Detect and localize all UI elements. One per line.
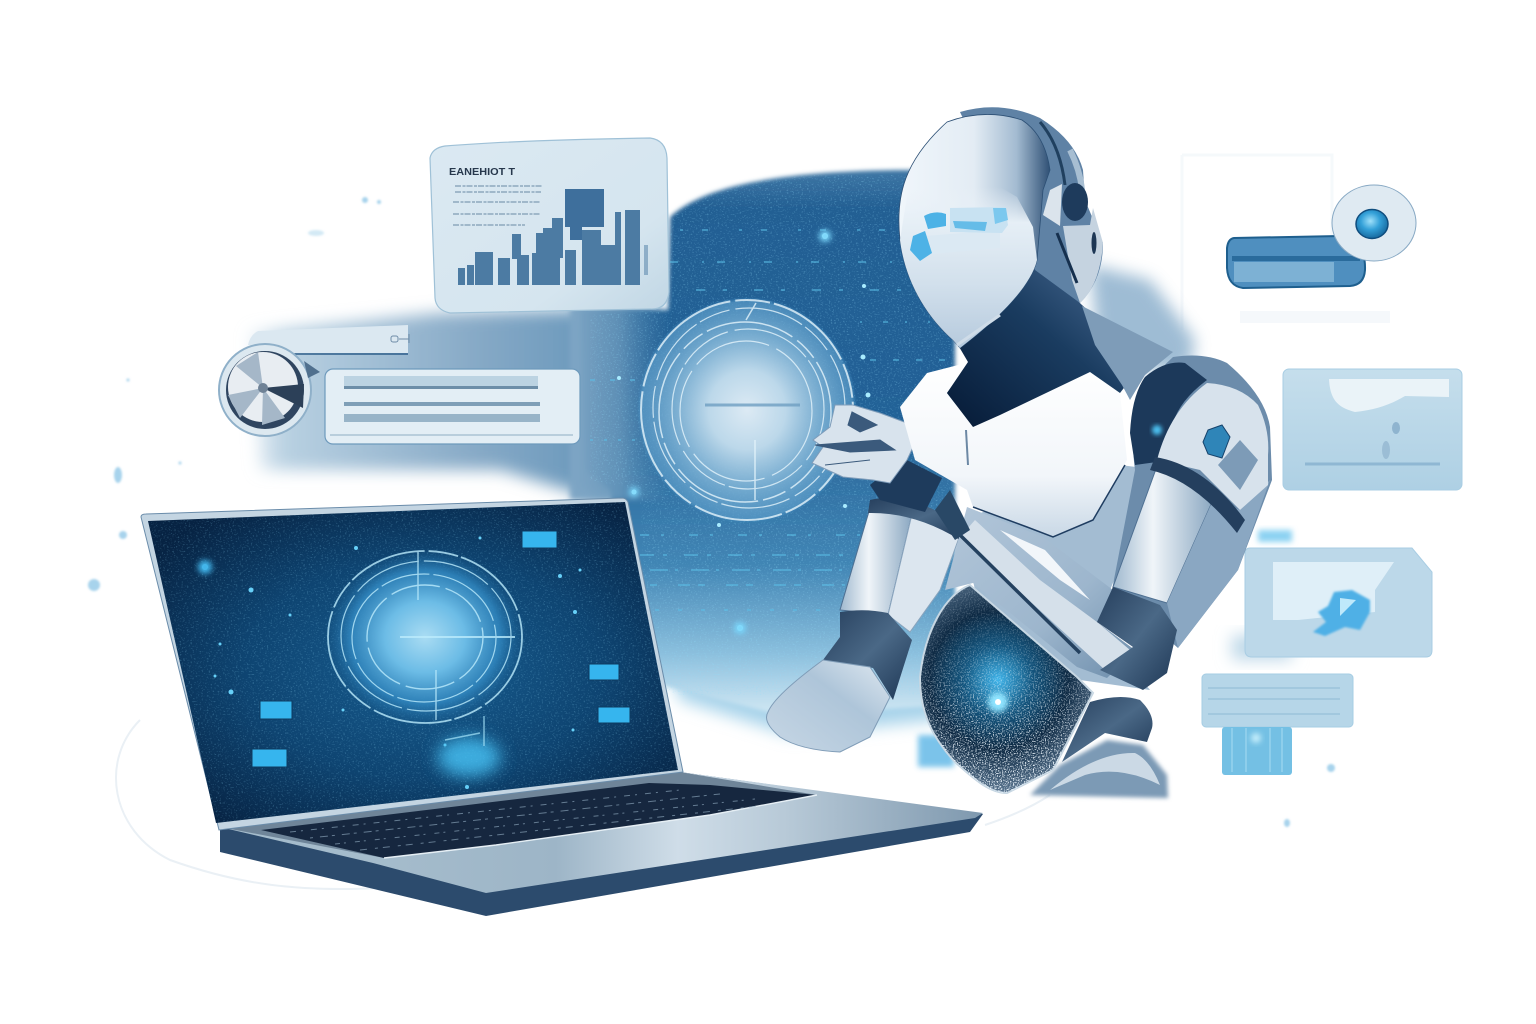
background energy sphere [250, 170, 955, 735]
laptop base [220, 772, 983, 916]
forearm cuff [1097, 587, 1177, 690]
panel: stacked card [1202, 674, 1353, 775]
panel: blob card [1232, 530, 1432, 660]
screen orb [325, 548, 525, 726]
panel: map card [1283, 369, 1462, 490]
upper arm [1112, 355, 1272, 648]
search icon [391, 334, 409, 343]
cuff [823, 610, 912, 700]
right ghost panel [1182, 155, 1390, 330]
visor [910, 207, 1008, 261]
screen glow below orb [437, 737, 501, 777]
bar chart [458, 189, 648, 285]
laptop screen [148, 502, 678, 823]
arm gem [1203, 425, 1230, 458]
hand [766, 660, 890, 752]
chart text lines [453, 186, 542, 225]
bicep tube [1113, 458, 1213, 603]
lower cloth and glow [918, 697, 1168, 798]
search bar panel [248, 325, 409, 354]
fingers [812, 405, 942, 512]
forearm [935, 490, 1177, 690]
keyboard [261, 783, 817, 858]
laptop lid [141, 498, 683, 830]
blue bar [1227, 236, 1365, 288]
eye ball [1332, 185, 1416, 261]
floating particles [88, 197, 1335, 827]
chest [900, 362, 1127, 537]
camera widget [1227, 185, 1416, 288]
headphone [960, 107, 1103, 303]
shoulder dark band [1130, 363, 1207, 465]
screen chips [252, 531, 630, 767]
list panel [325, 369, 580, 444]
outer shoulder [1112, 355, 1272, 648]
head [899, 114, 1050, 348]
hologram orb [637, 297, 857, 523]
neck [947, 262, 1135, 427]
back fill behind forearm [960, 465, 1160, 690]
laptop swirl line [116, 720, 1050, 889]
arm strap [1150, 457, 1245, 533]
blue blob [1313, 590, 1370, 636]
laptop [141, 498, 983, 916]
glass sphere [919, 584, 1094, 794]
chart title: EANEHIOT T [449, 166, 516, 178]
robot [766, 107, 1272, 810]
wrist strap [868, 498, 968, 540]
left arm [766, 498, 968, 752]
shoulder cap [1157, 383, 1268, 510]
shoulder haze [1090, 265, 1195, 370]
ear block [1043, 184, 1062, 226]
chart panel [430, 138, 669, 313]
icon: lens dial [219, 344, 320, 436]
